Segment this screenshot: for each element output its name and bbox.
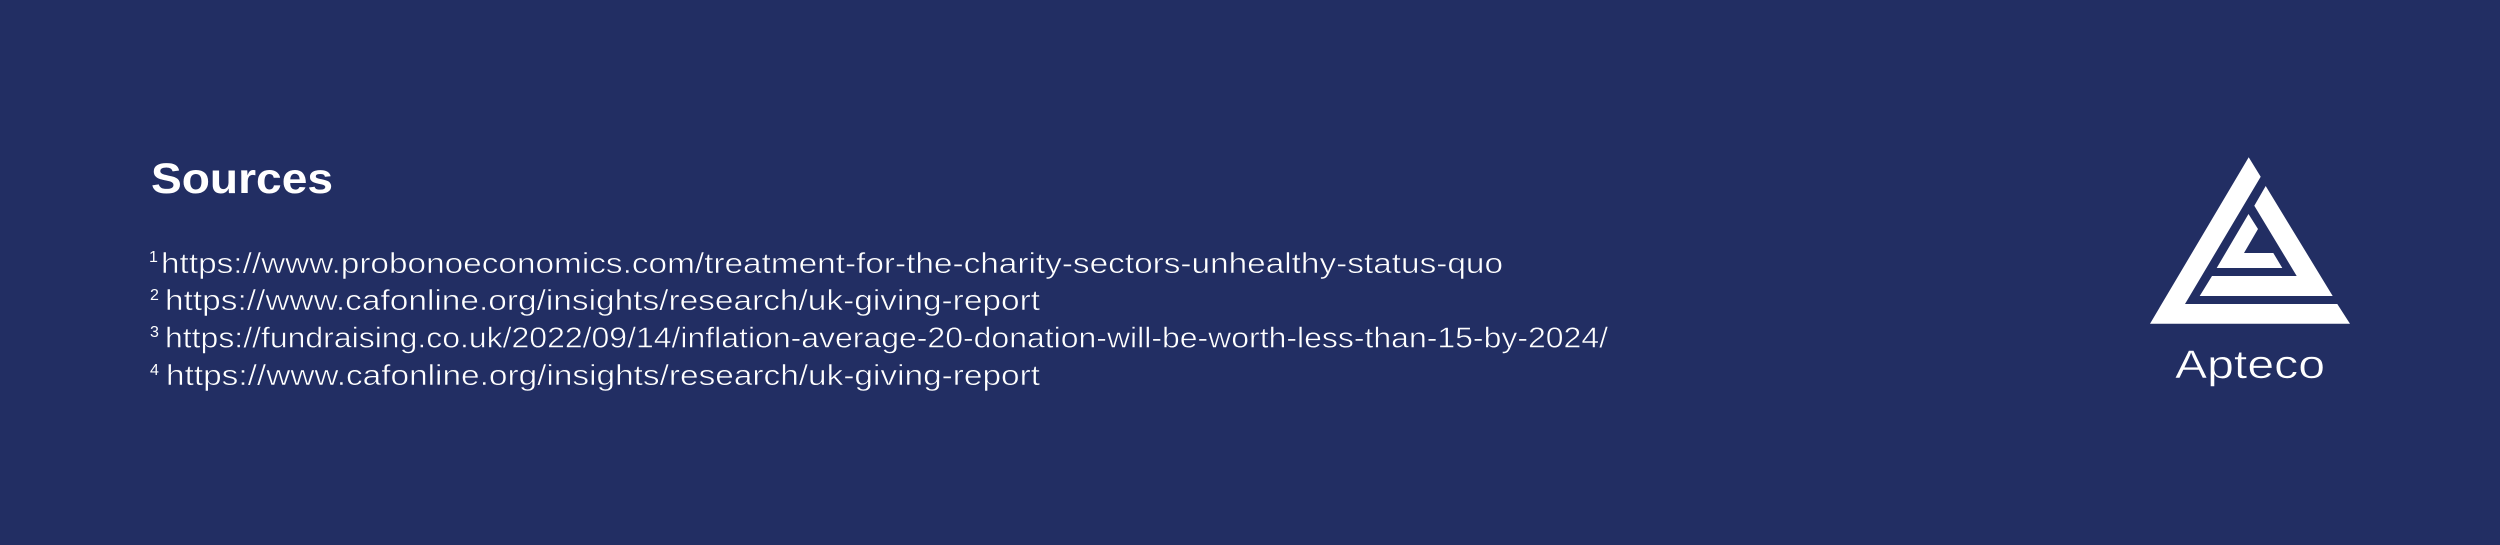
source 4: https://www.cafonline.org/insights/research/uk-giving-report — [166, 360, 1040, 392]
source 1: https://www.probonoeconomics.com/treatment-for-the-charity-sectors-unhealthy-status-quo — [161, 248, 1503, 280]
source 3: 3 — [150, 324, 159, 341]
source 3: https://fundraising.co.uk/2022/09/14/inflation-average-20-donation-will-be-worth-less-than-15-by-2024/ — [165, 322, 1608, 354]
source 2: 2 — [150, 287, 159, 304]
source 4: 4 — [150, 362, 159, 379]
source 2: https://www.cafonline.org/insights/research/uk-giving-report — [165, 285, 1040, 317]
source 1: 1 — [149, 249, 158, 266]
logo: Apteco — [2150, 157, 2350, 387]
heading: Sources: Sources — [151, 155, 333, 203]
source list — [149, 248, 1608, 392]
logo wordmark: Apteco — [2175, 343, 2325, 387]
icon: triangle mark — [2150, 157, 2350, 324]
